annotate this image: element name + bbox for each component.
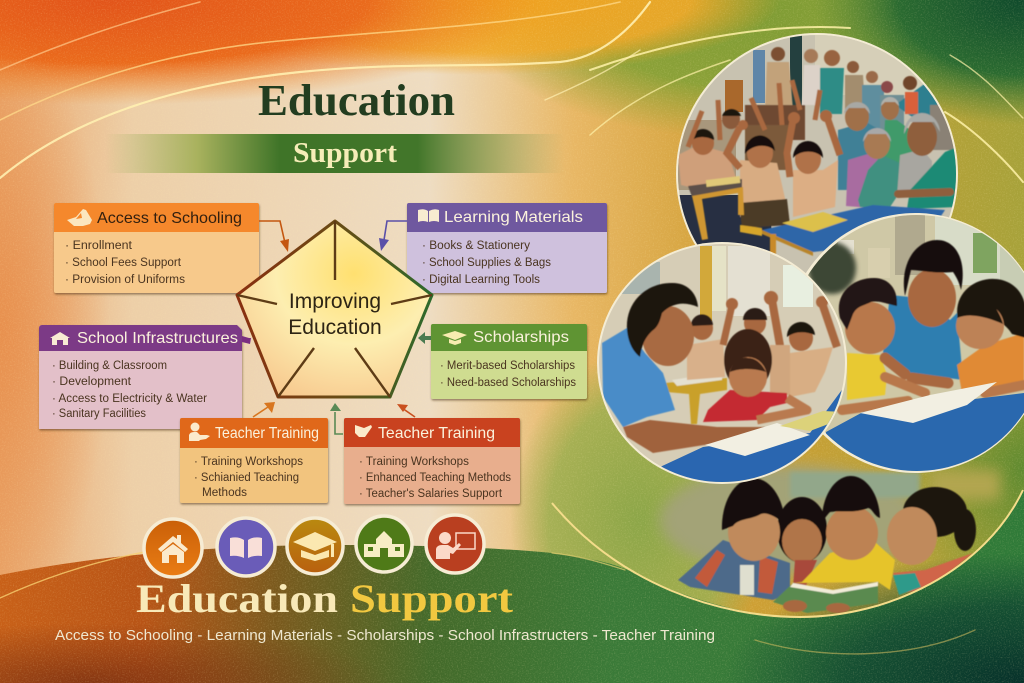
subtitle banner <box>105 134 565 173</box>
list: teacher training red <box>359 456 511 500</box>
icon row <box>144 515 484 577</box>
icon: book <box>418 209 439 222</box>
arrow: school infrastructures <box>242 336 251 344</box>
list: school infrastructures: · Building & Classroom <box>52 360 167 372</box>
list: access to schooling <box>65 240 185 286</box>
icon: teacher at board <box>426 515 484 573</box>
footer tagline: Access to Schooling - Learning Materials - Scholarships - School Infrastructers - Teacher Training <box>55 627 715 644</box>
icon: open book <box>217 518 275 576</box>
footer heading: Education <box>136 576 338 621</box>
panel: teacher training red <box>344 418 520 504</box>
list: scholarships: · Need-based Scholarships <box>440 377 576 389</box>
list: learning materials <box>422 240 551 286</box>
standing adults <box>765 62 793 110</box>
photo: boy, teacher and girl reading <box>785 213 1024 475</box>
photo: teacher with girl writing <box>597 242 847 484</box>
list: school infrastructures: · Sanitary Facilities <box>52 408 146 420</box>
heading: scholarships: Scholarships <box>473 329 569 346</box>
icon: school building <box>356 516 412 572</box>
heading: learning materials: Learning Materials <box>444 209 583 226</box>
icon: access to schooling <box>67 209 92 226</box>
list: teacher training red: · Enhanced Teaching Methods <box>359 472 511 484</box>
crowd middle <box>745 105 805 140</box>
list: learning materials: · Books & Stationery <box>422 240 530 252</box>
list: school infrastructures: · Access to Electricity & Water <box>52 393 207 405</box>
panel: school infrastructures <box>39 325 242 429</box>
list: teacher training red: · Training Workshops <box>359 456 469 468</box>
list: teacher training orange: · Training Workshops <box>194 456 303 468</box>
arrow: learning materials <box>379 221 407 251</box>
photo: children and elders <box>676 33 958 274</box>
list: teacher training orange <box>194 456 303 499</box>
list: access to schooling: · School Fees Support <box>65 257 182 269</box>
list: school infrastructures: · Development <box>52 376 132 388</box>
icon: teacher <box>189 422 210 441</box>
list: scholarships <box>440 360 576 389</box>
heading: school infrastructures: School Infrastructures <box>77 330 238 347</box>
heading: teacher training orange: Teacher Training <box>215 425 319 442</box>
list: teacher training orange: · Schianied Teaching <box>194 472 299 484</box>
subtitle banner: Support <box>293 138 398 169</box>
photo: reading children <box>552 465 1023 617</box>
panel: access to schooling <box>54 203 259 293</box>
list: school infrastructures <box>52 360 207 420</box>
blue table and book <box>762 205 945 252</box>
arrow: access to schooling <box>259 221 289 252</box>
icon: graduation cap <box>287 518 343 574</box>
list: learning materials: · Digital Learning Tools <box>422 274 540 286</box>
lower hill <box>0 490 1024 683</box>
list: teacher training red: · Teacher's Salaries Support <box>359 488 503 500</box>
footer heading: Support <box>350 576 514 621</box>
label: improving education: Improving <box>289 290 381 313</box>
panel: teacher training orange <box>180 418 328 503</box>
arrow: teacher training orange <box>253 402 275 417</box>
pentagon: improving education <box>237 221 432 397</box>
icon: house <box>50 332 70 345</box>
back left kids <box>678 148 736 187</box>
front kid 1 <box>740 160 787 217</box>
elders front <box>846 154 878 208</box>
panel: scholarships <box>431 324 587 399</box>
heading: access to schooling: Access to Schooling <box>97 210 242 227</box>
list: access to schooling: · Enrollment <box>65 240 133 252</box>
desk <box>688 179 742 197</box>
list: scholarships: · Merit-based Scholarships <box>440 360 575 372</box>
label: improving education: Education <box>288 316 382 339</box>
front kid 2 <box>793 160 838 217</box>
arrow: teacher training red <box>397 404 415 417</box>
icon: house <box>144 519 202 577</box>
title: Education <box>258 76 455 125</box>
list: access to schooling: · Provision of Uniforms <box>65 274 185 286</box>
list: teacher training orange: Methods <box>202 487 247 499</box>
arrow: teacher training red green <box>330 403 343 434</box>
heading: teacher training red: Teacher Training <box>378 425 495 442</box>
list: learning materials: · School Supplies & Bags <box>422 257 551 269</box>
arrow: scholarships <box>418 332 431 344</box>
panel: learning materials <box>407 203 607 293</box>
icon: checked book <box>355 425 372 437</box>
icon: graduation cap <box>442 331 467 345</box>
